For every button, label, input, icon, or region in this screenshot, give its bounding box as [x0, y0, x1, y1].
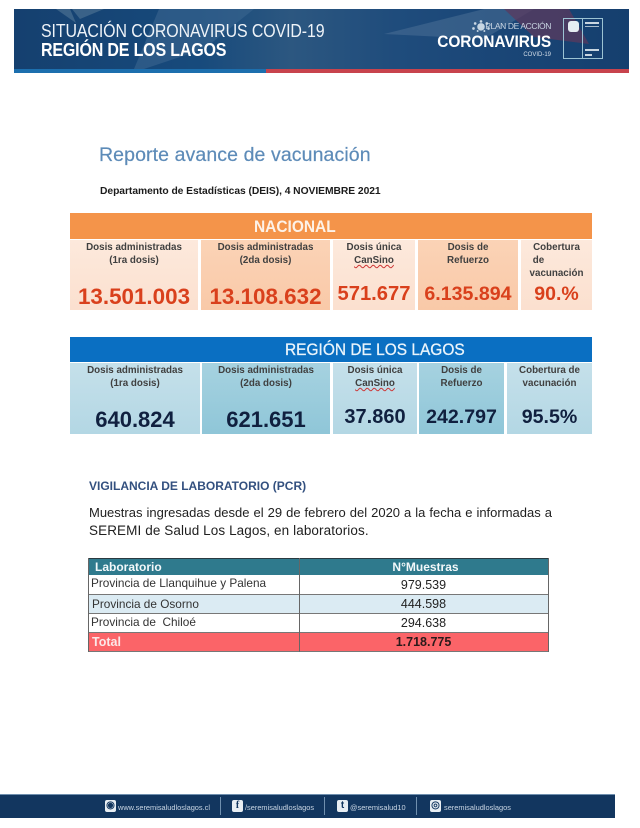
icon: facebook [232, 800, 243, 812]
región heading [70, 337, 592, 362]
stat: región refuerzo: Refuerzo [441, 378, 482, 389]
table row: llanquihue y palena: 979.539 [401, 578, 446, 592]
stat: región cansino [333, 363, 417, 434]
table row: chiloé: Provincia de Chiloé [91, 615, 196, 629]
stat: región cobertura: vacunación [523, 378, 576, 389]
laboratory description: SEREMI de Salud Los Lagos, en laboratorios. [89, 523, 369, 538]
icon: twitter [337, 800, 348, 812]
icon: instagram: ◎ [431, 800, 440, 811]
stat: región 1ra dosis: Dosis administradas [87, 364, 183, 376]
table row: osorno [88, 595, 549, 614]
stat: región 2da dosis: Dosis administradas [218, 364, 314, 376]
table total row [88, 633, 549, 652]
laboratory heading: VIGILANCIA DE LABORATORIO (PCR) [89, 479, 306, 493]
plan de acción text: PLAN DE ACCIÓN [485, 21, 551, 31]
header title: SITUACIÓN CORONAVIRUS COVID-19 [41, 20, 325, 41]
stat: nacional 1ra dosis: 13.501.003 [78, 284, 190, 309]
stat: región refuerzo: Dosis de [441, 364, 482, 376]
instagram handle: seremisaludloslagos [444, 803, 511, 812]
nacional heading [70, 213, 592, 239]
stat: región refuerzo [419, 363, 504, 434]
stat: nacional cansino: Dosis única [346, 242, 402, 252]
stat: región cansino: CanSino [355, 378, 395, 389]
icon: twitter: t [341, 800, 344, 811]
icon: facebook: f [236, 800, 239, 811]
icon: virus dots [472, 20, 490, 32]
stat: región 1ra dosis: (1ra dosis) [110, 378, 160, 389]
table row: chiloé: 294.638 [401, 616, 446, 630]
stat: región 2da dosis: 621.651 [226, 407, 306, 432]
stat: región 1ra dosis: 640.824 [95, 407, 175, 432]
panel: nacional [70, 213, 592, 310]
report subtitle: Departamento de Estadísticas (DEIS), 4 NOVIEMBRE 2021 [100, 186, 381, 197]
covid-19 text: COVID-19 [523, 52, 551, 58]
table row: osorno: Provincia de Osorno [92, 597, 199, 611]
header banner [14, 9, 629, 73]
stat: nacional refuerzo [418, 240, 518, 310]
table total row: Total [92, 635, 121, 649]
stat: región cobertura: Cobertura de [519, 364, 580, 376]
stat: nacional 2da dosis: (2da dosis) [240, 255, 291, 266]
stat: región 2da dosis: (2da dosis) [240, 378, 292, 389]
header subtitle: REGIÓN DE LOS LAGOS [41, 40, 226, 60]
plan de acción logo [437, 20, 551, 58]
table row: chiloé [88, 614, 549, 633]
stat: nacional cobertura: 90.% [534, 283, 579, 305]
stat: región cobertura: 95.5% [522, 406, 577, 428]
footer separators [220, 797, 417, 815]
stat: nacional 1ra dosis: (1ra dosis) [109, 255, 159, 266]
stat: nacional cobertura: Cobertura [533, 242, 580, 252]
table total row: 1.718.775 [396, 635, 451, 649]
stat: nacional refuerzo: 6.135.894 [424, 283, 512, 305]
table row: osorno: 444.598 [401, 597, 446, 611]
stat: región cansino: 37.860 [344, 406, 406, 428]
laboratory description [89, 505, 552, 538]
table row: llanquihue y palena: Provincia de Llanquihue y Palena [91, 576, 266, 590]
stat: nacional cobertura: vacunación [530, 268, 583, 279]
stat: región cansino: Dosis única [348, 364, 402, 376]
ministry emblem [563, 18, 603, 59]
table borders [88, 558, 89, 652]
stat: nacional cansino: CanSino [354, 255, 394, 266]
table header [88, 558, 549, 575]
footer bar [0, 794, 615, 818]
table row: llanquihue y palena [88, 575, 549, 595]
table: muestras por laboratorio [88, 558, 549, 652]
stat: región 2da dosis [202, 363, 330, 434]
website: www.seremisaludloslagos.cl [118, 803, 210, 812]
nacional heading: NACIONAL [254, 217, 336, 236]
stat: nacional 2da dosis: 13.108.632 [209, 284, 322, 309]
stat: nacional 2da dosis [201, 240, 330, 310]
stat: nacional refuerzo: Refuerzo [447, 255, 489, 266]
stat: nacional cobertura: de [533, 255, 544, 266]
stat: región cobertura [507, 363, 592, 434]
coronavirus wordmark: CORONAVIRUS [437, 32, 551, 51]
header accent stripe [14, 69, 629, 73]
table header: N°Muestras [392, 560, 459, 574]
stat: nacional 2da dosis: Dosis administradas [218, 242, 313, 252]
facebook handle: /seremisaludloslagos [245, 803, 314, 812]
stat: nacional 1ra dosis [70, 240, 198, 310]
stat: región 1ra dosis [70, 363, 200, 434]
panel: región de los lagos [70, 337, 592, 434]
table header: Laboratorio [95, 560, 162, 574]
icon: web: ◉ [106, 800, 115, 811]
región heading: REGIÓN DE LOS LAGOS [285, 340, 465, 359]
stat: nacional 1ra dosis: Dosis administradas [86, 242, 182, 252]
laboratory description: Muestras ingresadas desde el 29 de febrero del 2020 a la fecha e informadas a [89, 505, 552, 520]
stat: nacional cansino: 571.677 [338, 283, 410, 305]
stat: nacional cansino [333, 240, 415, 310]
stat: nacional refuerzo: Dosis de [448, 242, 488, 252]
stat: nacional cobertura [521, 240, 592, 310]
twitter handle: @seremisalud10 [350, 803, 406, 812]
report title: Reporte avance de vacunación [99, 144, 371, 166]
stat: región refuerzo: 242.797 [426, 406, 497, 428]
